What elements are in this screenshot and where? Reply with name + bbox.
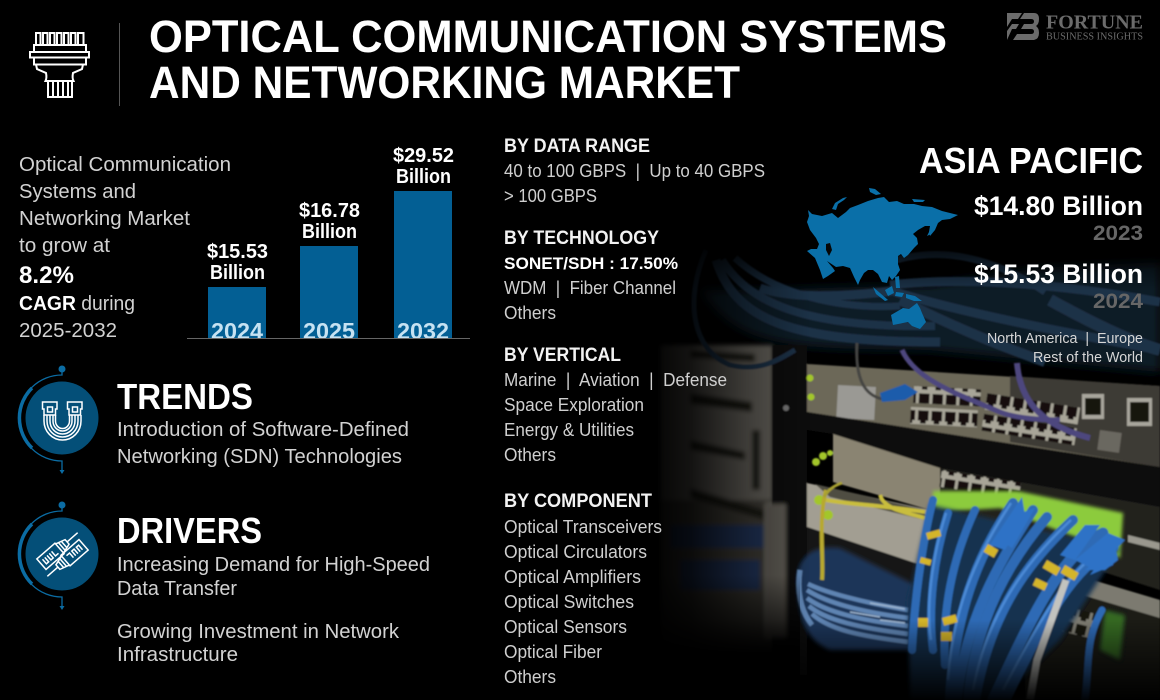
regional summary: Asia Pacific: North America | Europe xyxy=(987,331,1143,347)
bar 2032: 2032 xyxy=(397,318,449,344)
trends text: Networking (SDN) Technologies xyxy=(117,445,402,468)
market summary text: to grow at xyxy=(19,234,110,257)
background photo: network rack with blue cables xyxy=(640,220,1160,700)
market summary text: 8.2% xyxy=(19,262,74,289)
segment: by vertical: Others xyxy=(504,444,556,465)
icon: network connector xyxy=(30,33,89,97)
segment: by component: Optical Amplifiers xyxy=(504,566,641,587)
bar 2024: $15.53 xyxy=(207,241,268,263)
segment: by technology: Others xyxy=(504,302,556,323)
bar 2032: Billion xyxy=(396,166,451,188)
segment: by component: Others xyxy=(504,666,556,687)
segment: by vertical: Marine | Aviation | Defense xyxy=(504,369,727,390)
bar 2032 xyxy=(393,145,454,344)
trends text xyxy=(117,376,409,468)
segment: by component xyxy=(504,491,662,687)
segment: by component: Optical Circulators xyxy=(504,541,647,562)
segment: by data range: > 100 GBPS xyxy=(504,185,597,206)
bar 2032: $29.52 xyxy=(393,145,454,167)
regional summary: Asia Pacific xyxy=(919,140,1143,366)
bar 2025 xyxy=(299,200,360,344)
segment: by data range: 40 to 100 GBPS | Up to 40 GBPS xyxy=(504,160,765,181)
bar 2025: Billion xyxy=(302,221,357,243)
drivers text: Growing Investment in Network xyxy=(117,620,400,643)
trends text: TRENDS xyxy=(117,376,253,417)
map: Asia Pacific xyxy=(807,188,958,329)
segment: by component: Optical Sensors xyxy=(504,616,627,637)
market summary text: Networking Market xyxy=(19,207,190,230)
logo: Fortune Business Insights: BUSINESS INSIGHTS xyxy=(1046,32,1143,42)
photo: left server rack xyxy=(660,345,787,660)
photo: blue connector boots xyxy=(990,497,1125,575)
photo: lower right switch xyxy=(940,468,1160,590)
regional summary: Asia Pacific: 2023 xyxy=(1093,221,1143,245)
photo: dark shelf xyxy=(807,412,1160,510)
photo: upper switch xyxy=(807,364,1160,467)
bar 2024: Billion xyxy=(210,262,265,284)
photo: green glow strip xyxy=(933,491,1123,558)
drivers text: Data Transfer xyxy=(117,577,237,600)
regional summary: Asia Pacific: $15.53 Billion xyxy=(974,259,1143,289)
segment: by technology: WDM | Fiber Channel xyxy=(504,277,676,298)
bar chart: market size xyxy=(187,145,470,344)
market summary text: Systems and xyxy=(19,180,136,203)
market summary text: CAGR during xyxy=(19,292,135,315)
segment: by data range: BY DATA RANGE xyxy=(504,136,650,157)
drivers text: DRIVERS xyxy=(117,510,262,551)
segment: by vertical: Space Exploration xyxy=(504,394,644,415)
icon: drivers cable badge xyxy=(19,502,98,610)
segment: by data range xyxy=(504,136,765,206)
bar 2024 xyxy=(207,241,268,344)
segment: by vertical: BY VERTICAL xyxy=(504,345,621,366)
photo: blue patch cables xyxy=(912,500,1113,700)
segment: by component: Optical Transceivers xyxy=(504,516,662,537)
trends text: Introduction of Software-Defined xyxy=(117,418,409,441)
regional summary: Asia Pacific: ASIA PACIFIC xyxy=(919,140,1143,181)
title: OPTICAL COMMUNICATION SYSTEMS xyxy=(149,11,947,62)
logo: Fortune Business Insights xyxy=(1007,12,1143,42)
drivers text: Increasing Demand for High-Speed xyxy=(117,553,430,576)
bar 2025: $16.78 xyxy=(299,200,360,222)
segment: by technology xyxy=(504,228,678,323)
title xyxy=(149,11,947,108)
drivers text xyxy=(117,510,430,666)
segment: by technology: BY TECHNOLOGY xyxy=(504,228,659,249)
market summary text xyxy=(19,153,231,342)
photo: dark upper cables xyxy=(694,250,1160,367)
photo: blue plug xyxy=(880,384,918,402)
segment: by vertical: Energy & Utilities xyxy=(504,419,634,440)
drivers text: Infrastructure xyxy=(117,643,238,666)
title: AND NETWORKING MARKET xyxy=(149,57,740,108)
segment: by component: BY COMPONENT xyxy=(504,491,652,512)
logo: Fortune Business Insights: FORTUNE xyxy=(1046,12,1143,34)
icon: trends cable badge xyxy=(19,366,98,474)
regional summary: Asia Pacific: 2024 xyxy=(1093,289,1143,313)
segment: by component: Optical Fiber xyxy=(504,641,602,662)
regional summary: Asia Pacific: Rest of the World xyxy=(1033,350,1143,366)
photo: navy cable shadow mass xyxy=(700,262,1160,372)
market summary text: 2025-2032 xyxy=(19,319,117,342)
photo: purple cables xyxy=(902,350,1090,438)
photo: blue cable shadow mass xyxy=(908,505,1120,700)
photo: port rows xyxy=(910,386,981,427)
photo: LED lights xyxy=(806,374,833,520)
market summary text: Optical Communication xyxy=(19,153,231,176)
bar 2024: 2024 xyxy=(211,318,263,344)
segment: by component: Optical Switches xyxy=(504,591,634,612)
header divider xyxy=(119,23,120,106)
segment: by technology: SONET/SDH : 17.50% xyxy=(504,254,678,273)
bar 2025: 2025 xyxy=(303,318,355,344)
photo: yellow cable tags xyxy=(918,529,1079,641)
photo fade overlays xyxy=(640,220,810,700)
photo: coiled cable bundle xyxy=(797,547,915,650)
segment: by vertical xyxy=(504,345,727,465)
photo: beige unit xyxy=(833,434,940,510)
regional summary: Asia Pacific: $14.80 Billion xyxy=(974,191,1143,221)
map notch: Caspian Sea xyxy=(826,243,832,256)
photo: dark rack pole xyxy=(772,345,807,675)
